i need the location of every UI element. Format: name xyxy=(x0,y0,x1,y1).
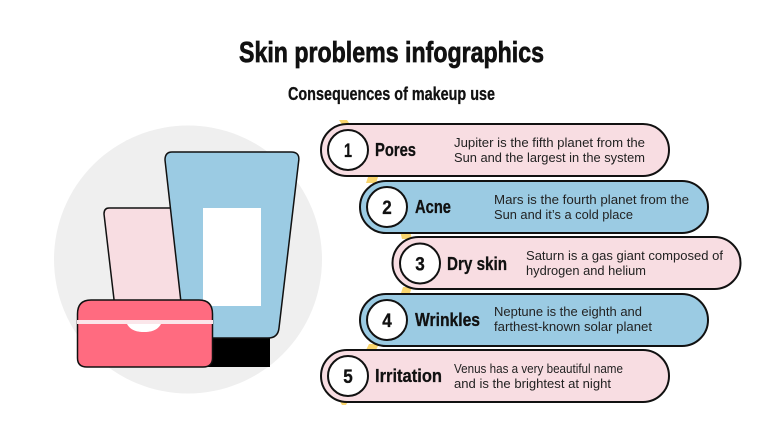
icon: tube cap xyxy=(205,337,270,367)
item 3: Dry skin: Dry skin xyxy=(447,253,507,274)
item 2: Acne: Sun and it’s a cold place xyxy=(494,208,633,222)
item 3: Dry skin xyxy=(392,237,740,289)
title: Skin problems infographics xyxy=(239,37,544,69)
item 5: Irritation: Venus has a very beautiful name xyxy=(454,362,623,376)
item 2: Acne xyxy=(360,181,708,233)
item 1: Pores: Jupiter is the fifth planet from the xyxy=(454,136,645,150)
illustration: makeup products xyxy=(54,126,322,394)
item 5: Irritation: Irritation xyxy=(375,365,442,386)
item 3: Dry skin: hydrogen and helium xyxy=(526,264,646,278)
icon: red compact xyxy=(77,300,213,367)
item 4: Wrinkles: Neptune is the eighth and xyxy=(494,305,642,319)
item 5: Irritation: and is the brightest at night xyxy=(454,377,612,391)
item 1: Pores: Pores xyxy=(375,139,416,160)
item 3: Dry skin: 3 xyxy=(415,254,425,276)
item 1: Pores xyxy=(321,124,669,176)
item 5: Irritation xyxy=(321,350,669,402)
item 5: Irritation: 5 xyxy=(343,366,353,388)
item 4: Wrinkles: Wrinkles xyxy=(415,309,480,330)
item 4: Wrinkles: farthest-known solar planet xyxy=(494,320,653,334)
item 2: Acne: Acne xyxy=(415,196,451,217)
icon: blue tube xyxy=(165,152,299,338)
item 1: Pores: Sun and the largest in the system xyxy=(454,151,645,165)
item 4: Wrinkles xyxy=(360,294,708,346)
item 4: Wrinkles: 4 xyxy=(382,310,392,332)
background circle xyxy=(54,126,322,394)
item 2: Acne: 2 xyxy=(382,197,392,219)
item 3: Dry skin: Saturn is a gas giant composed of xyxy=(526,249,724,263)
subtitle: Consequences of makeup use xyxy=(288,84,495,104)
icon: pink tube xyxy=(104,208,190,308)
item 1: Pores: 1 xyxy=(344,140,352,162)
connector: yellow path xyxy=(339,120,412,405)
item 2: Acne: Mars is the fourth planet from the xyxy=(494,193,689,207)
